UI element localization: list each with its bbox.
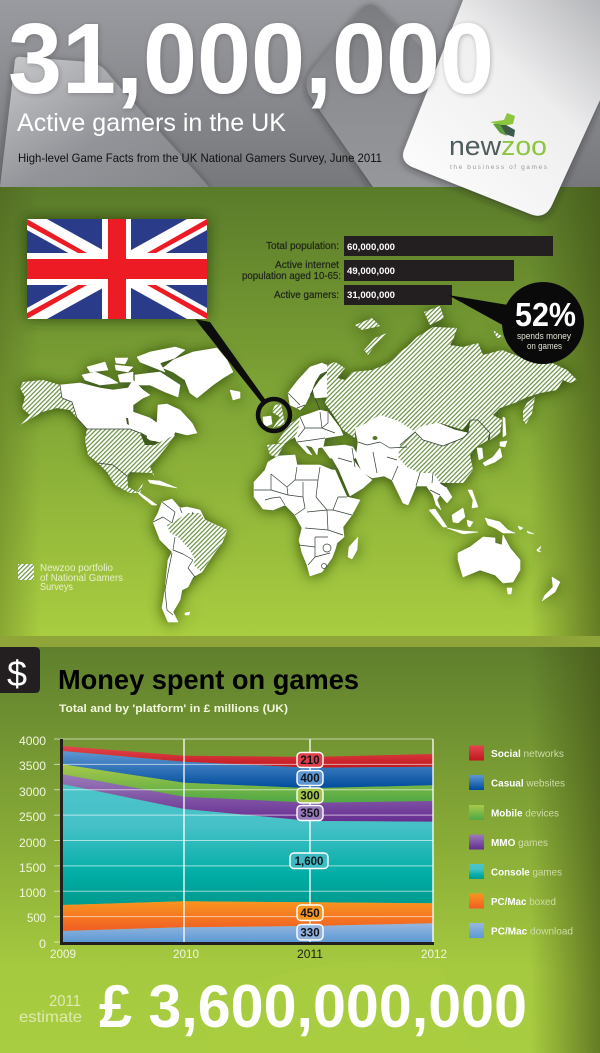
world map	[20, 306, 577, 622]
bar: active gamers: 31,000,000	[347, 290, 395, 301]
value badge: 1,600	[290, 853, 328, 868]
logo card	[403, 0, 600, 216]
area: casual	[62, 751, 433, 788]
legend: pc download	[469, 923, 573, 938]
bar: total population: Total population:	[266, 241, 339, 252]
y axis labels: 3000	[19, 785, 46, 799]
legend: mmo	[469, 834, 548, 850]
legend: pc download: PC/Mac download	[491, 926, 573, 938]
area: mmo	[62, 774, 433, 822]
legend: casual: Casual websites	[491, 778, 565, 790]
legend: pc boxed	[469, 894, 556, 908]
legend: social: Social networks	[491, 748, 564, 760]
legend: social	[469, 746, 564, 760]
value badge: 300	[297, 788, 323, 803]
bar: active internet population: population aged 10-65:	[242, 271, 341, 282]
legend: survey portfolio: Surveys	[40, 582, 73, 593]
value badge: 400: 400	[300, 773, 320, 785]
bar: active internet population	[242, 260, 514, 282]
logo wordmark: newzoo	[449, 131, 547, 161]
area: mobile	[62, 764, 433, 803]
value badge: 330: 330	[300, 928, 320, 940]
value badge: 400	[297, 770, 323, 786]
bar: active gamers	[274, 285, 452, 305]
value badge: 330	[297, 924, 323, 940]
total: 2011 estimate label	[19, 993, 82, 1026]
value badge: 350: 350	[300, 808, 320, 820]
bar: active gamers: Active gamers:	[274, 290, 339, 301]
y axis labels: 2500	[19, 810, 46, 824]
legend: console	[469, 864, 562, 879]
callout: 52% spends money: on games	[527, 341, 562, 351]
title: 31,000,000: 31,000,000	[8, 3, 494, 115]
logo tagline: the business of games	[450, 164, 548, 171]
bar: total population: 60,000,000	[347, 242, 395, 253]
callout: 52% spends money	[448, 282, 584, 364]
icon: dollar box: $	[7, 653, 27, 694]
money section background	[0, 647, 600, 1053]
callout: UK location marker	[195, 319, 290, 431]
sub-heading: Total and by 'platform' in £ millions (UK)	[59, 703, 288, 715]
value badge: 210: 210	[300, 755, 320, 767]
section divider strip	[0, 636, 600, 647]
value badge: 350	[297, 806, 323, 820]
y axis labels: 4000	[19, 734, 46, 748]
x axis labels: 2012	[421, 947, 447, 961]
icon: UK flag	[27, 219, 207, 319]
legend: mobile	[469, 805, 559, 820]
map: far east peninsula	[523, 397, 535, 424]
value badge: 450	[297, 905, 323, 920]
bar: active internet population: Active internet	[275, 260, 339, 271]
value badge: 1,600: 1,600	[295, 856, 323, 868]
callout: 52% spends money: 52%	[515, 296, 576, 333]
legend: casual	[469, 775, 565, 790]
value badge: 450: 450	[300, 908, 320, 920]
header background	[0, 0, 600, 187]
callout: 52% spends money: spends money	[517, 331, 571, 341]
total: 3.6 billion pounds: £ 3,600,000,000	[99, 973, 527, 1040]
map: asia	[322, 415, 507, 510]
y axis labels: 3500	[19, 759, 46, 773]
chart legend	[469, 746, 573, 938]
value badge: 210	[297, 752, 323, 768]
area: social	[62, 746, 433, 768]
x axis labels: 2011	[297, 947, 323, 961]
map: north america	[20, 347, 233, 505]
x axis labels: 2009	[50, 947, 76, 961]
map: europe	[230, 363, 343, 457]
map: south america	[153, 499, 227, 622]
legend: survey portfolio: Newzoo portfolio	[40, 563, 113, 574]
y axis labels	[19, 734, 46, 951]
legend: mobile: Mobile devices	[491, 808, 559, 820]
stacked area chart	[19, 734, 447, 961]
y axis labels: 1000	[19, 886, 46, 900]
map: russia	[325, 327, 577, 440]
map: indonesia and oceania	[429, 490, 560, 601]
y axis labels: 1500	[19, 861, 46, 875]
legend: pc boxed: PC/Mac boxed	[491, 896, 556, 908]
bar: active internet population: 49,000,000	[347, 266, 395, 277]
icon: dollar box	[0, 647, 40, 694]
x axis labels: 2010	[173, 947, 199, 961]
bar: total population	[266, 236, 553, 256]
x axis labels	[50, 947, 447, 961]
value badge: 300: 300	[300, 790, 320, 802]
bar chart: population	[242, 236, 553, 305]
area: pc download	[62, 923, 433, 942]
map: africa	[254, 455, 360, 576]
legend: console: Console games	[491, 866, 562, 878]
y axis labels: 0	[39, 937, 46, 951]
subtitle: active gamers: Active gamers in the UK	[17, 109, 286, 137]
area: pc boxed	[62, 901, 433, 931]
legend: survey portfolio: of National Gamers	[40, 573, 123, 584]
legend: survey portfolio	[18, 563, 123, 593]
heading: money spent on games: Money spent on games	[58, 664, 359, 695]
total: 2011 estimate label: 2011	[49, 993, 81, 1010]
icon: newzoo logo mark	[490, 113, 515, 137]
survey description: High-level Game Facts from the UK National Gamers Survey, June 2011	[18, 151, 382, 165]
legend: mmo: MMO games	[491, 837, 548, 849]
y axis labels: 2000	[19, 836, 46, 850]
green map section background	[0, 187, 600, 636]
map: arctic islands	[355, 306, 503, 355]
total: 2011 estimate label: estimate	[19, 1009, 82, 1026]
grid lines	[54, 739, 433, 942]
y axis labels: 500	[27, 911, 46, 925]
area: console	[62, 784, 433, 905]
